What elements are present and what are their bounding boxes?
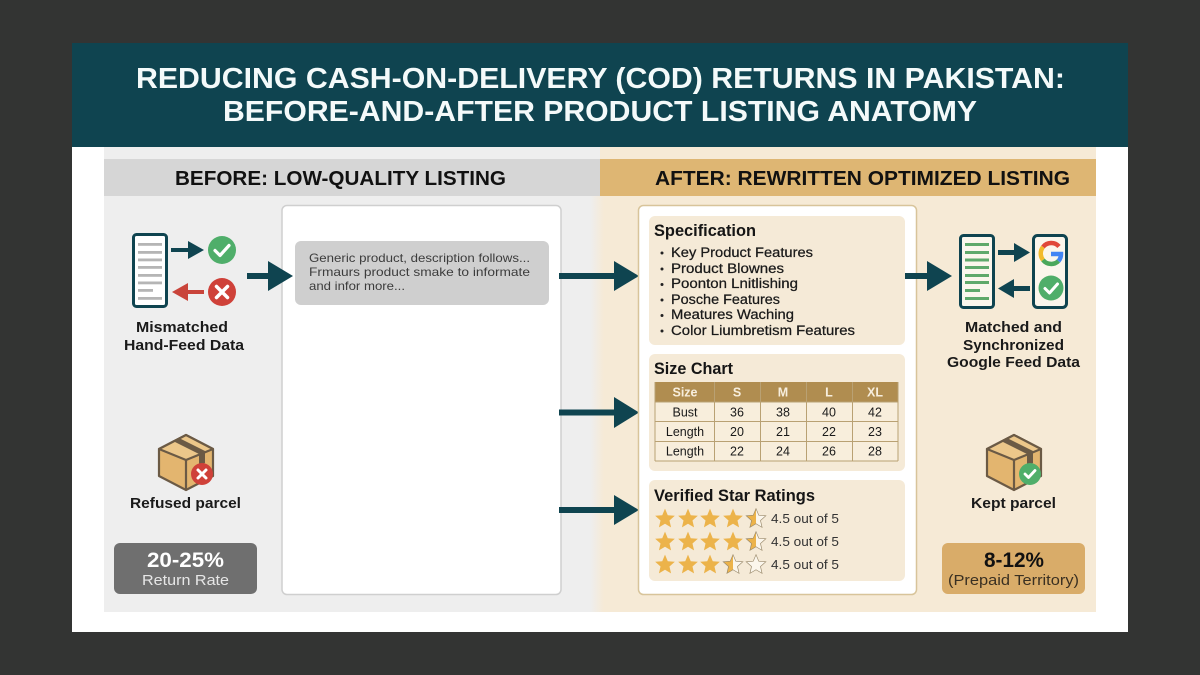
label: matched data: Matched and — [965, 320, 1062, 336]
section: specification: Specification — [654, 222, 756, 240]
generic description block: Generic product, description follows... — [309, 251, 530, 265]
size table: 38 — [776, 406, 790, 420]
title banner: BEFORE-AND-AFTER PRODUCT LISTING ANATOMY — [223, 96, 977, 128]
stars row 3 — [655, 555, 839, 573]
arrow: to star ratings — [559, 495, 639, 525]
size table: L — [825, 386, 833, 400]
size table — [655, 382, 898, 461]
section: specification — [649, 216, 905, 345]
label: mismatched data: Mismatched — [136, 320, 228, 336]
stat: return rate after — [942, 543, 1085, 594]
stars row 2: 4.5 out of 5 — [771, 535, 839, 549]
section: specification: Color Liumbretism Features — [671, 323, 855, 338]
stat: return rate before: 20-25% — [147, 549, 224, 572]
before heading — [104, 159, 600, 196]
section: specification: Meatures Waching — [671, 307, 794, 322]
after heading — [600, 159, 1096, 196]
size table: Size — [672, 386, 698, 400]
size table: 20 — [730, 425, 744, 439]
section: specification: Key Product Features — [671, 245, 813, 260]
size table: XL — [867, 386, 883, 400]
section: specification: Poonton Lnitlishing — [671, 276, 798, 291]
label: mismatched data — [124, 320, 245, 354]
icon: synchronized google feed — [960, 236, 1066, 308]
size table: Bust — [672, 406, 698, 420]
generic description block: and infor more... — [309, 279, 405, 293]
panel: before — [104, 147, 600, 612]
arrow: to size chart — [559, 397, 639, 428]
arrow: listing to synced feed — [905, 261, 952, 291]
arrow: to specification — [559, 261, 639, 291]
section: size chart — [649, 354, 905, 471]
icon: refused parcel — [159, 435, 213, 490]
panel: optimized listing card — [638, 206, 916, 594]
section: verified star ratings — [649, 480, 905, 581]
generic description block: Frmaurs product smake to informate — [309, 265, 530, 279]
size table: 36 — [730, 406, 744, 420]
title banner — [72, 43, 1128, 147]
stars row 1: 4.5 out of 5 — [771, 512, 839, 526]
label: mismatched data: Hand-Feed Data — [124, 338, 245, 354]
size table: M — [778, 386, 788, 400]
label: matched data: Google Feed Data — [947, 355, 1081, 371]
stars row 3: 4.5 out of 5 — [771, 558, 839, 572]
label: matched data: Synchronized — [963, 338, 1064, 354]
label: refused parcel: Refused parcel — [130, 496, 241, 512]
stars row 1 — [655, 509, 839, 527]
after heading: AFTER: REWRITTEN OPTIMIZED LISTING — [655, 168, 1070, 190]
size table: 21 — [776, 425, 790, 439]
label: matched data — [947, 320, 1081, 371]
size table: 22 — [822, 425, 836, 439]
section: size chart: Size Chart — [654, 360, 733, 378]
white card background — [72, 43, 1128, 632]
stars row 2 — [655, 532, 839, 550]
stat: return rate after: (Prepaid Territory) — [948, 572, 1079, 589]
stat: return rate after: 8-12% — [984, 549, 1044, 572]
section: specification: Posche Features — [671, 292, 780, 307]
before heading: BEFORE: LOW-QUALITY LISTING — [175, 168, 506, 190]
size table: 28 — [868, 444, 882, 458]
section: specification: Product Blownes — [671, 261, 784, 276]
size table: 23 — [868, 425, 882, 439]
size table: Length — [666, 425, 704, 439]
title banner: REDUCING CASH-ON-DELIVERY (COD) RETURNS IN PAKISTAN: — [136, 63, 1065, 95]
size table: 24 — [776, 444, 790, 458]
size table: S — [733, 386, 741, 400]
arrow: feed to listing — [247, 261, 293, 291]
generic description block — [295, 241, 549, 305]
size table: 26 — [822, 444, 836, 458]
section: verified star ratings: Verified Star Ratings — [654, 487, 815, 505]
size table: 22 — [730, 444, 744, 458]
size table: 40 — [822, 406, 836, 420]
size table: 42 — [868, 406, 882, 420]
panel: after — [590, 147, 1096, 612]
stat: return rate before — [114, 543, 257, 594]
label: kept parcel: Kept parcel — [971, 496, 1056, 512]
icon: google g — [1041, 243, 1061, 264]
panel: low-quality listing card — [282, 206, 561, 594]
icon: kept parcel — [987, 435, 1041, 490]
stat: return rate before: Return Rate — [142, 572, 229, 589]
size table: Length — [666, 444, 704, 458]
icon: mismatched feed — [134, 234, 236, 306]
